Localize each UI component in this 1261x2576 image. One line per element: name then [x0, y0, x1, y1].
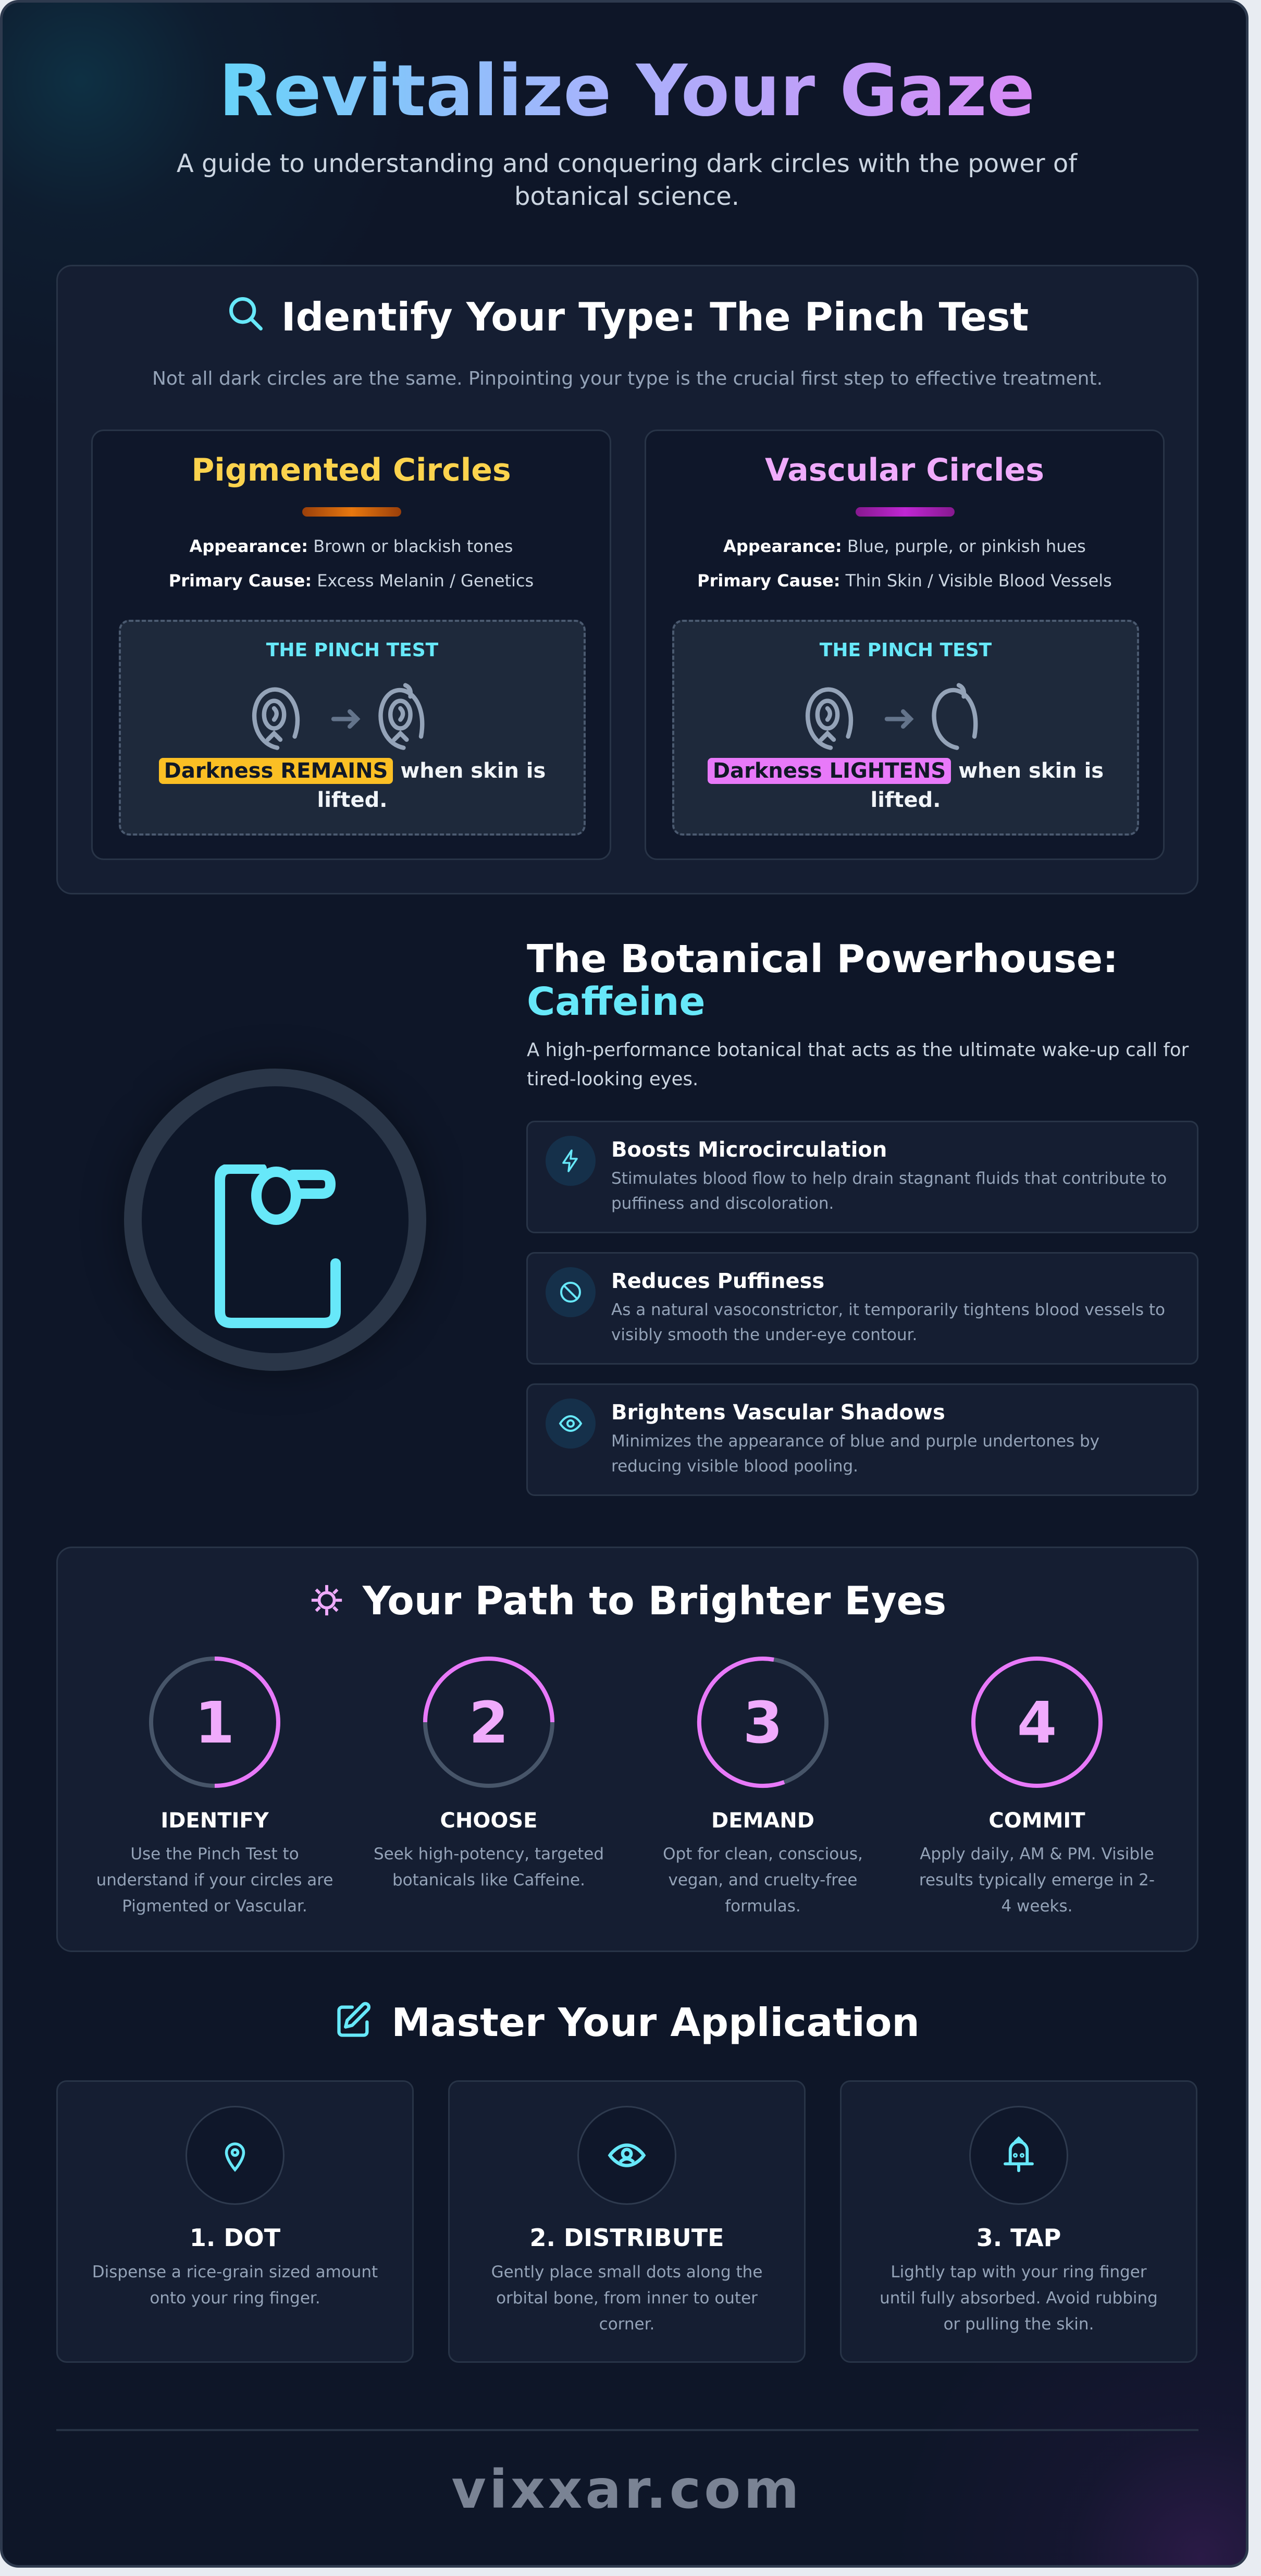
- panel: path to brighter eyes: [56, 1547, 1198, 1952]
- step 4: Apply daily, AM & PM. Visible results typically emerge in 2-4 weeks.: [919, 1845, 1155, 1916]
- footer: brand: vixxar.com: [451, 2459, 802, 2521]
- subtitle: A guide to understanding and conquering dark circles with the power of botanical science.: [177, 149, 1077, 211]
- card: dot: [56, 2080, 414, 2363]
- icon: eye: [546, 1399, 596, 1449]
- step 4: [919, 1809, 1155, 1916]
- details: Primary Cause: Thin Skin / Visible Blood Vessels: [697, 571, 1112, 591]
- heading: botanical powerhouse: [527, 937, 1118, 1024]
- step 2: [374, 1809, 604, 1890]
- feature: boosts microcirculation: Stimulates blood flow to help drain stagnant fluids that contribute to puffiness and discoloration.: [611, 1169, 1167, 1213]
- step 3: Opt for clean, conscious, vegan, and cruelty-free formulas.: [663, 1845, 863, 1916]
- step 3: DEMAND: [711, 1809, 814, 1833]
- feature: reduces puffiness: [526, 1252, 1198, 1365]
- card: tap: 3. TAP: [976, 2224, 1061, 2252]
- result text: Darkness REMAINS when skin is lifted.: [164, 759, 546, 812]
- card: tap: [840, 2080, 1197, 2363]
- step 3: [663, 1809, 863, 1916]
- steps ring graphics: 1: [195, 1689, 234, 1756]
- heading: Your Path to Brighter Eyes: [363, 1578, 946, 1624]
- feature: brightens vascular shadows: Minimizes the appearance of blue and purple undertones by reducing visible blood pooling.: [611, 1432, 1099, 1476]
- feature: boosts microcirculation: Boosts Microcirculation: [611, 1138, 887, 1162]
- icon: tap: [969, 2106, 1068, 2205]
- feature: reduces puffiness: Reduces Puffiness: [611, 1269, 824, 1293]
- card: dot: Dispense a rice-grain sized amount onto your ring finger.: [92, 2263, 378, 2308]
- feature: reduces puffiness: As a natural vasoconstrictor, it temporarily tightens blood vessels to visibly smooth the under-eye contour.: [611, 1301, 1165, 1344]
- steps ring graphics: 4: [1017, 1689, 1057, 1756]
- icon: edit: [337, 2002, 371, 2037]
- step 1: Use the Pinch Test to understand if your circles are Pigmented or Vascular.: [96, 1845, 333, 1916]
- pinch test box: [672, 620, 1139, 836]
- feature: brightens vascular shadows: Brightens Vascular Shadows: [611, 1401, 945, 1425]
- card title: Pigmented Circles: [191, 452, 511, 488]
- icon: ban: [546, 1267, 596, 1317]
- icon: lightning: [546, 1136, 596, 1186]
- details: Appearance: Brown or blackish tones: [190, 536, 513, 556]
- card title: Vascular Circles: [765, 452, 1044, 488]
- intro text: Not all dark circles are the same. Pinpointing your type is the crucial first step to effective treatment.: [152, 368, 1103, 389]
- pinch test box: THE PINCH TEST: [266, 640, 438, 661]
- heading: master your application: Master Your Application: [391, 2000, 920, 2045]
- step 1: [96, 1809, 333, 1916]
- card: distribute: Gently place small dots along the orbital bone, from inner to outer corner.: [491, 2263, 762, 2334]
- icon: caffeine cup in ring: [124, 1069, 426, 1371]
- panel: identify your type: [56, 265, 1198, 894]
- result text: Darkness LIGHTENS when skin is lifted.: [713, 759, 1104, 812]
- card: pigmented: [91, 430, 611, 860]
- feature: brightens vascular shadows: [526, 1383, 1198, 1496]
- details: [169, 536, 534, 591]
- icon: magnifier: [229, 297, 263, 330]
- feature: boosts microcirculation: [526, 1121, 1198, 1233]
- steps ring graphics: 2: [469, 1689, 509, 1756]
- pinch test box: THE PINCH TEST: [820, 640, 992, 661]
- step 4: COMMIT: [988, 1809, 1085, 1833]
- details: Appearance: Blue, purple, or pinkish hues: [723, 536, 1086, 556]
- title: Revitalize Your Gaze: [219, 50, 1035, 132]
- card: vascular: [645, 430, 1165, 860]
- step 2: Seek high-potency, targeted botanicals like Caffeine.: [374, 1845, 604, 1890]
- step 1: IDENTIFY: [160, 1809, 269, 1833]
- accent bar: [302, 507, 401, 517]
- icon: pin: [186, 2106, 285, 2205]
- icon: sun/gear: [312, 1585, 342, 1616]
- card: distribute: 2. DISTRIBUTE: [529, 2224, 724, 2252]
- card: tap: Lightly tap with your ring finger until fully absorbed. Avoid rubbing or pulling the skin.: [880, 2263, 1158, 2334]
- icon: eye before/after: [806, 683, 978, 750]
- heading: botanical powerhouse: The Botanical Powerhouse:: [527, 937, 1118, 982]
- card: dot: 1. DOT: [190, 2224, 280, 2252]
- card: distribute: [448, 2080, 806, 2363]
- step 2: CHOOSE: [440, 1809, 537, 1833]
- heading: identify your type: Identify Your Type: The Pinch Test: [281, 294, 1029, 340]
- icon: eye: [577, 2106, 676, 2205]
- steps ring graphics: 3: [743, 1689, 783, 1756]
- caffeine description: A high-performance botanical that acts as the ultimate wake-up call for tired-looking eyes.: [527, 1039, 1189, 1090]
- details: [697, 536, 1112, 591]
- heading: botanical powerhouse: Caffeine: [527, 979, 706, 1024]
- icon: eye before/after: [252, 683, 424, 750]
- accent bar: [856, 507, 955, 517]
- pinch test box: [119, 620, 586, 836]
- details: Primary Cause: Excess Melanin / Genetics: [169, 571, 534, 591]
- steps ring graphics: [149, 1657, 1103, 1788]
